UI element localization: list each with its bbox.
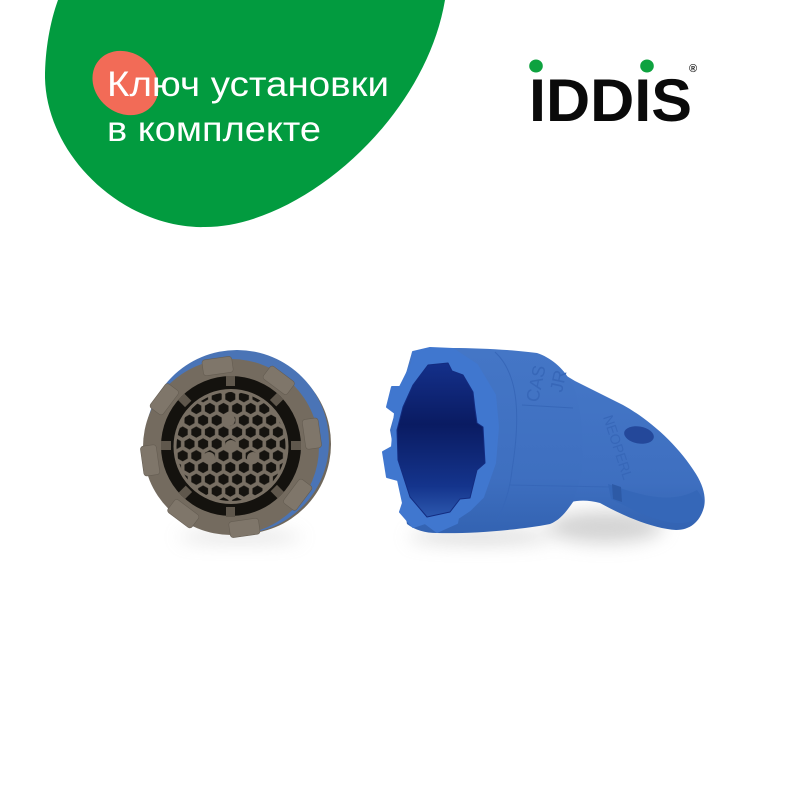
icon: blue installation key [383, 348, 705, 533]
heading [107, 64, 389, 149]
aerator outer rim [143, 359, 319, 535]
aerator mesh hubs [203, 414, 259, 464]
aerator back ring [151, 354, 331, 534]
key handle hole [623, 424, 655, 446]
panel: green blob [45, 0, 445, 227]
key embossed labels: JR [546, 368, 570, 394]
shadows under products [178, 511, 663, 543]
key embossed labels: NEOPERL [600, 413, 636, 482]
key cylinder opening [397, 363, 485, 517]
key embossed labels [522, 363, 636, 482]
aerator dark inner ring [161, 376, 301, 516]
aerator spokes [161, 376, 301, 517]
key embossed labels: CAS [522, 363, 550, 404]
icon: aerator [140, 350, 331, 538]
aerator rim tabs [140, 356, 322, 538]
key handle [540, 372, 705, 530]
heading: в комплекте [107, 109, 321, 149]
aerator honeycomb mesh [175, 390, 287, 502]
key cylinder body [390, 348, 583, 533]
logo: IDDIS: ® [689, 63, 697, 75]
key handle underside edge [608, 484, 704, 523]
logo: IDDIS: IDDIS [529, 67, 692, 134]
heading: Ключ установки [107, 64, 389, 104]
key latch detail [612, 484, 622, 502]
aerator blue gasket [145, 350, 329, 534]
key toothed rim [383, 348, 498, 532]
accent: coral blob [79, 38, 172, 128]
key cylinder seam lines [495, 352, 610, 520]
